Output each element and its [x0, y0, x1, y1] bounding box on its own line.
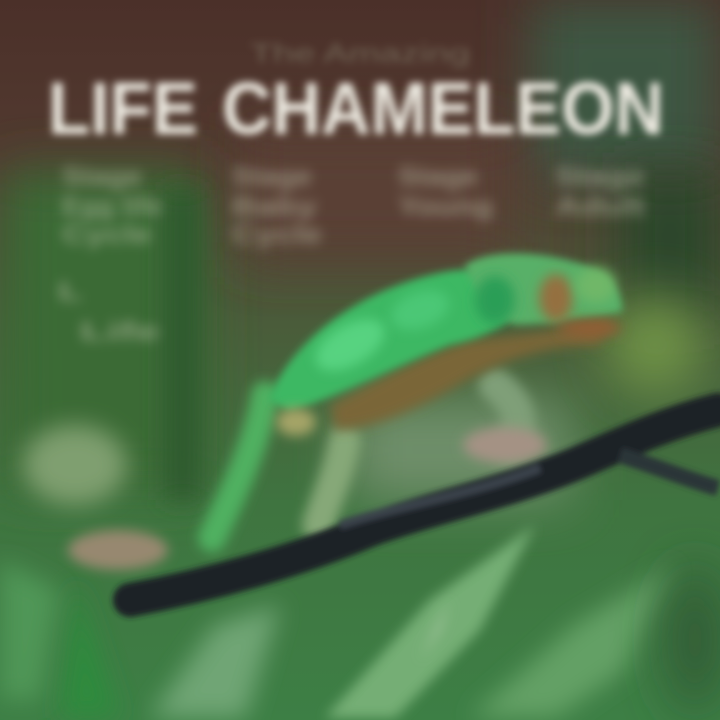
- text columns: faint blurred captions: Stage: [398, 161, 478, 191]
- front leg: [495, 385, 518, 445]
- eye patch: [539, 274, 573, 322]
- title: [48, 38, 664, 150]
- head: [465, 253, 622, 325]
- body highlights: [307, 309, 393, 381]
- text columns: faint blurred captions: Cycle: [232, 219, 322, 249]
- text columns: faint blurred captions: Stage: [555, 161, 645, 191]
- title: CHAMELEON: [222, 67, 664, 150]
- title: The Amazing: [250, 38, 470, 68]
- torso: [268, 269, 522, 412]
- text columns: faint blurred captions: Adult: [555, 191, 645, 221]
- text columns: faint blurred captions: L: [58, 276, 83, 306]
- hind leg: [318, 440, 345, 525]
- text columns: faint blurred captions: Cycle: [62, 219, 152, 249]
- belly: [330, 318, 610, 430]
- foot left: [68, 530, 168, 570]
- foot on branch: [463, 427, 547, 463]
- tail: [212, 395, 265, 538]
- title: LIFE: [48, 67, 198, 150]
- text columns: faint blurred captions: [58, 161, 645, 346]
- text columns: faint blurred captions: Stage: [232, 161, 312, 191]
- branch: [130, 410, 718, 600]
- text columns: faint blurred captions: Life: [80, 316, 160, 346]
- chameleon: [212, 253, 622, 538]
- text columns: faint blurred captions: Stage: [62, 161, 142, 191]
- text columns: faint blurred captions: Young: [398, 191, 493, 221]
- text columns: faint blurred captions: Baby: [232, 191, 318, 221]
- text columns: faint blurred captions: Egg life: [62, 191, 162, 221]
